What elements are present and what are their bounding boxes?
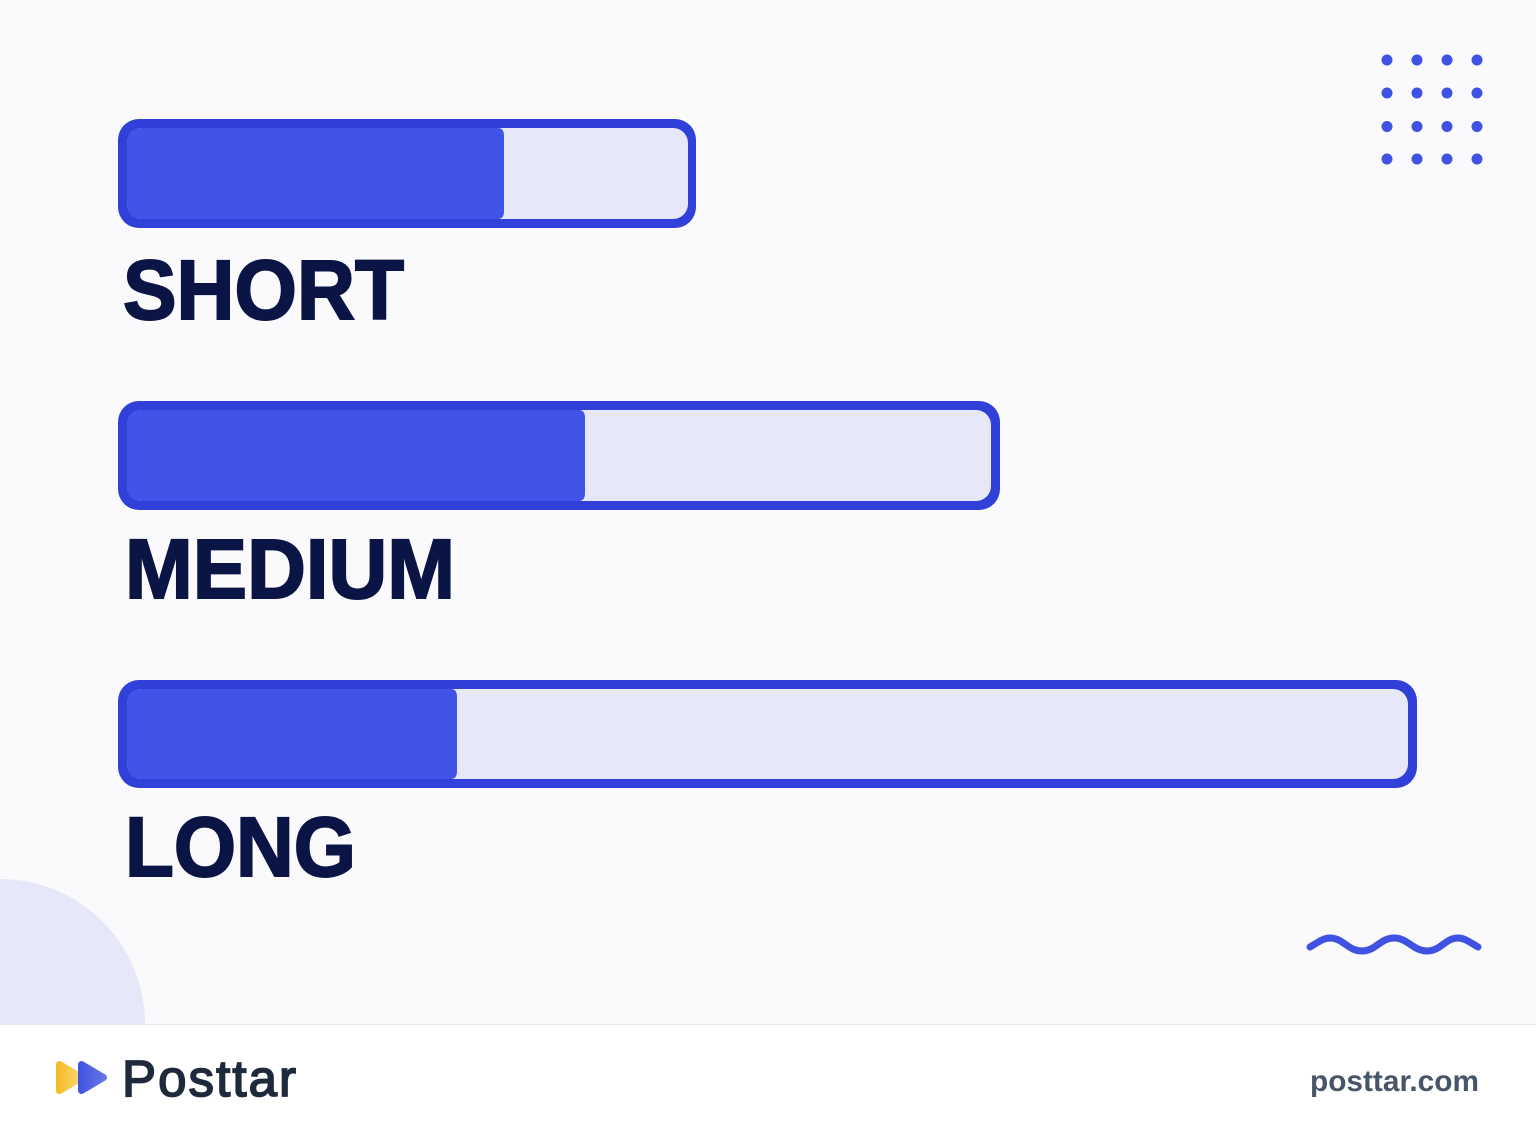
dot grid [1382, 54, 1482, 164]
label: long: LONG [125, 800, 356, 894]
footer bar [0, 1024, 1536, 1136]
medium progress bar [118, 401, 1000, 510]
label: medium: MEDIUM [125, 522, 455, 616]
decorative wave [1310, 938, 1478, 951]
decorative quarter circle [0, 879, 145, 1024]
icon: posttar logo [60, 1064, 104, 1090]
long progress bar [118, 680, 1417, 788]
label: short: SHORT [123, 243, 404, 337]
brand name: Posttar [122, 1050, 296, 1107]
website url: posttar.com [1310, 1065, 1479, 1098]
short progress bar [118, 119, 696, 228]
